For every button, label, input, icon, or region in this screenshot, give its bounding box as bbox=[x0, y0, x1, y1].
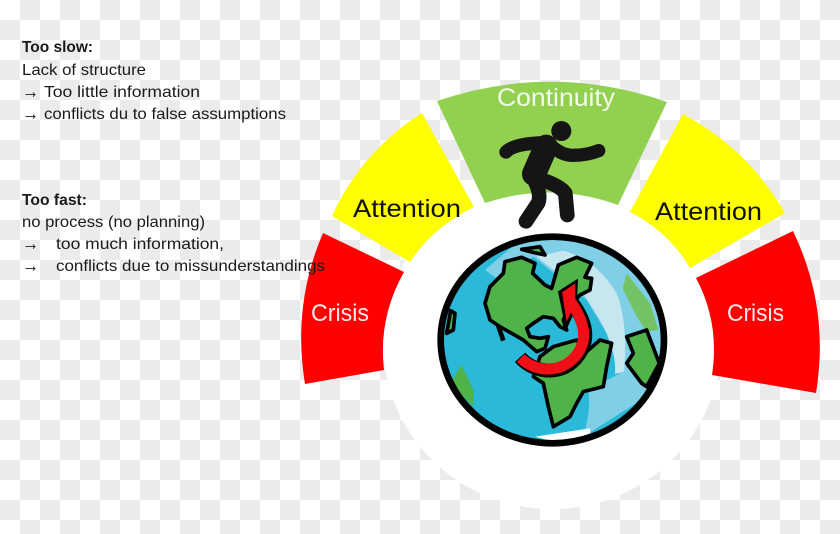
text block: too fast: conflicts due to missunderstandings bbox=[56, 258, 325, 275]
sector: crisis right bbox=[696, 231, 820, 393]
icon: red rotation arrow bbox=[520, 279, 585, 371]
text block: too slow: conflicts du to false assumptions bbox=[44, 106, 286, 123]
text block: too fast bbox=[22, 192, 325, 277]
icon: running person bbox=[506, 121, 599, 221]
text block: too slow: → bbox=[22, 103, 39, 125]
text block: too slow bbox=[22, 39, 286, 125]
text block: too fast: → bbox=[22, 255, 39, 277]
sector: attention left: Attention bbox=[353, 195, 461, 223]
text block: too slow: Too little information bbox=[44, 84, 200, 101]
text block: too slow: Lack of structure bbox=[22, 62, 146, 79]
sector: continuity: Continuity bbox=[497, 84, 616, 112]
white base circle bbox=[383, 177, 721, 509]
text block: too fast: no process (no planning) bbox=[22, 214, 205, 231]
text block: too slow: Too slow: bbox=[22, 39, 93, 56]
sector: attention right: Attention bbox=[655, 198, 762, 226]
sector: crisis left bbox=[301, 233, 404, 384]
panel: speed gauge bbox=[301, 82, 820, 393]
text block: too fast: → bbox=[22, 233, 39, 255]
sector: attention left bbox=[332, 113, 474, 262]
sector: crisis right: Crisis bbox=[727, 300, 784, 327]
sector: attention right bbox=[630, 114, 785, 268]
text block: too fast: too much information, bbox=[56, 236, 224, 253]
text block: too slow: → bbox=[22, 81, 39, 103]
sector: crisis left: Crisis bbox=[311, 300, 369, 327]
text block: too fast: Too fast: bbox=[22, 192, 87, 209]
icon: globe bbox=[440, 233, 670, 444]
sector: continuity bbox=[437, 82, 667, 205]
